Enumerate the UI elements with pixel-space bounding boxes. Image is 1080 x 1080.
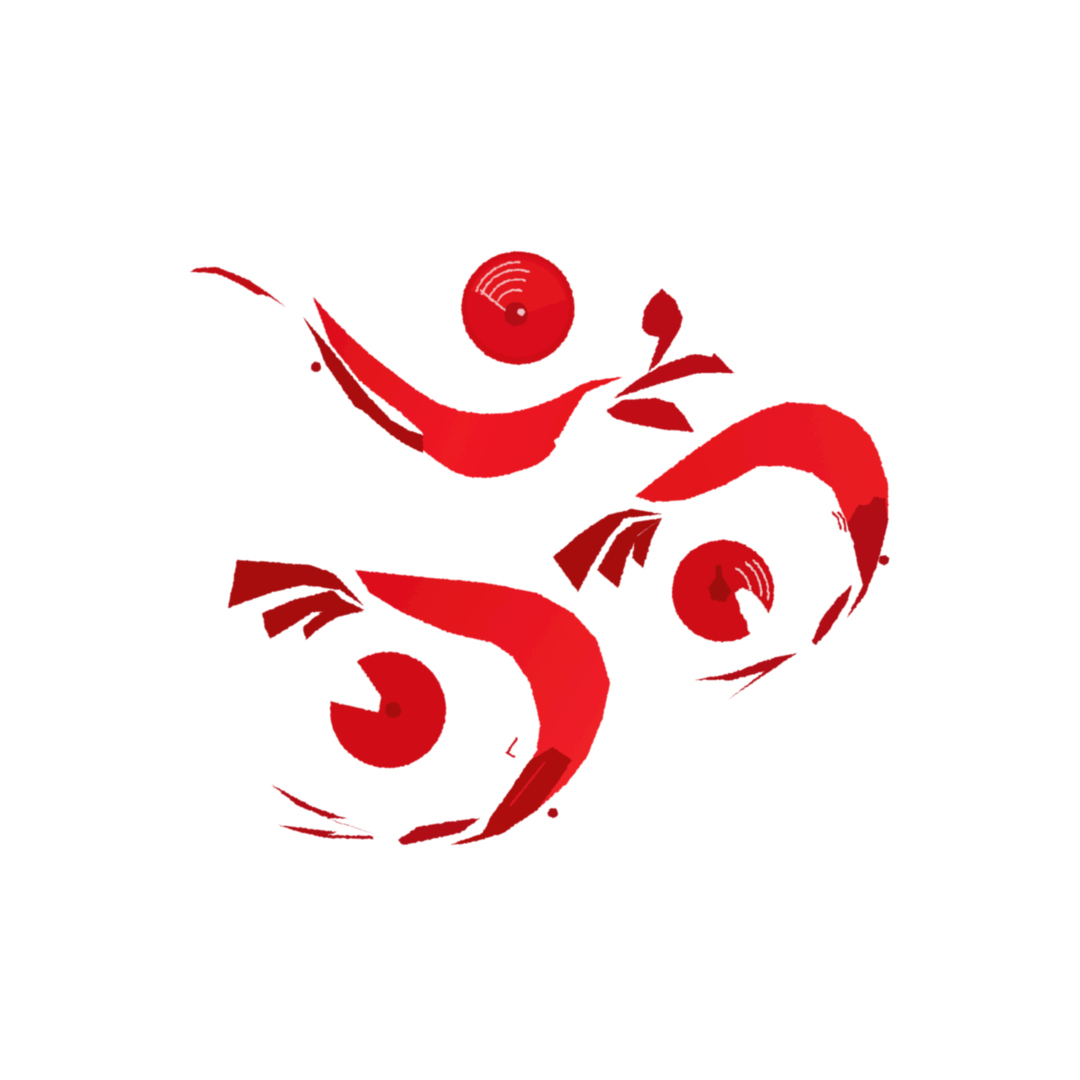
dark centre of the circle: [708, 565, 731, 602]
lower dash: [398, 818, 480, 845]
lower left circle bindu: [310, 640, 446, 768]
middle leaf: [614, 353, 734, 398]
white wedge in the circle: [735, 588, 800, 660]
small flick inside arc: [507, 738, 517, 757]
small dot left of crescent: [311, 362, 321, 372]
top right leaf strokes: [607, 289, 734, 432]
thin upper-left stroke: [190, 267, 286, 307]
main lower arc: [355, 570, 610, 845]
top circle bindu: [462, 252, 574, 364]
right sweeping brush stroke: [635, 402, 889, 700]
lower right dash: [812, 585, 852, 645]
dot right: [879, 555, 889, 565]
top sweeping brush stroke: [190, 267, 623, 478]
right wing strokes: [553, 509, 662, 592]
lower left sweeping brush stroke: [272, 570, 610, 845]
red streak in dark part: [510, 762, 545, 806]
left lower flicks: [272, 785, 377, 835]
dry-brush arcs in the circle: [476, 262, 530, 310]
right flicks: [695, 653, 797, 700]
dot lower: [548, 808, 558, 818]
left wing strokes: [228, 560, 365, 640]
lower leaf: [607, 398, 694, 432]
dark lower part of lower arc: [450, 747, 572, 845]
right circle bindu: [672, 540, 800, 660]
main crescent stroke: [313, 297, 623, 478]
second left lower flick: [278, 825, 373, 839]
dark lower part of right arc: [847, 497, 888, 618]
main right arc: [635, 402, 888, 618]
dark lower stroke of crescent: [303, 317, 423, 453]
small flicks inside arc: [832, 512, 846, 532]
dry-brush arcs in the circle: [736, 560, 768, 600]
upper leaf: [642, 289, 683, 372]
